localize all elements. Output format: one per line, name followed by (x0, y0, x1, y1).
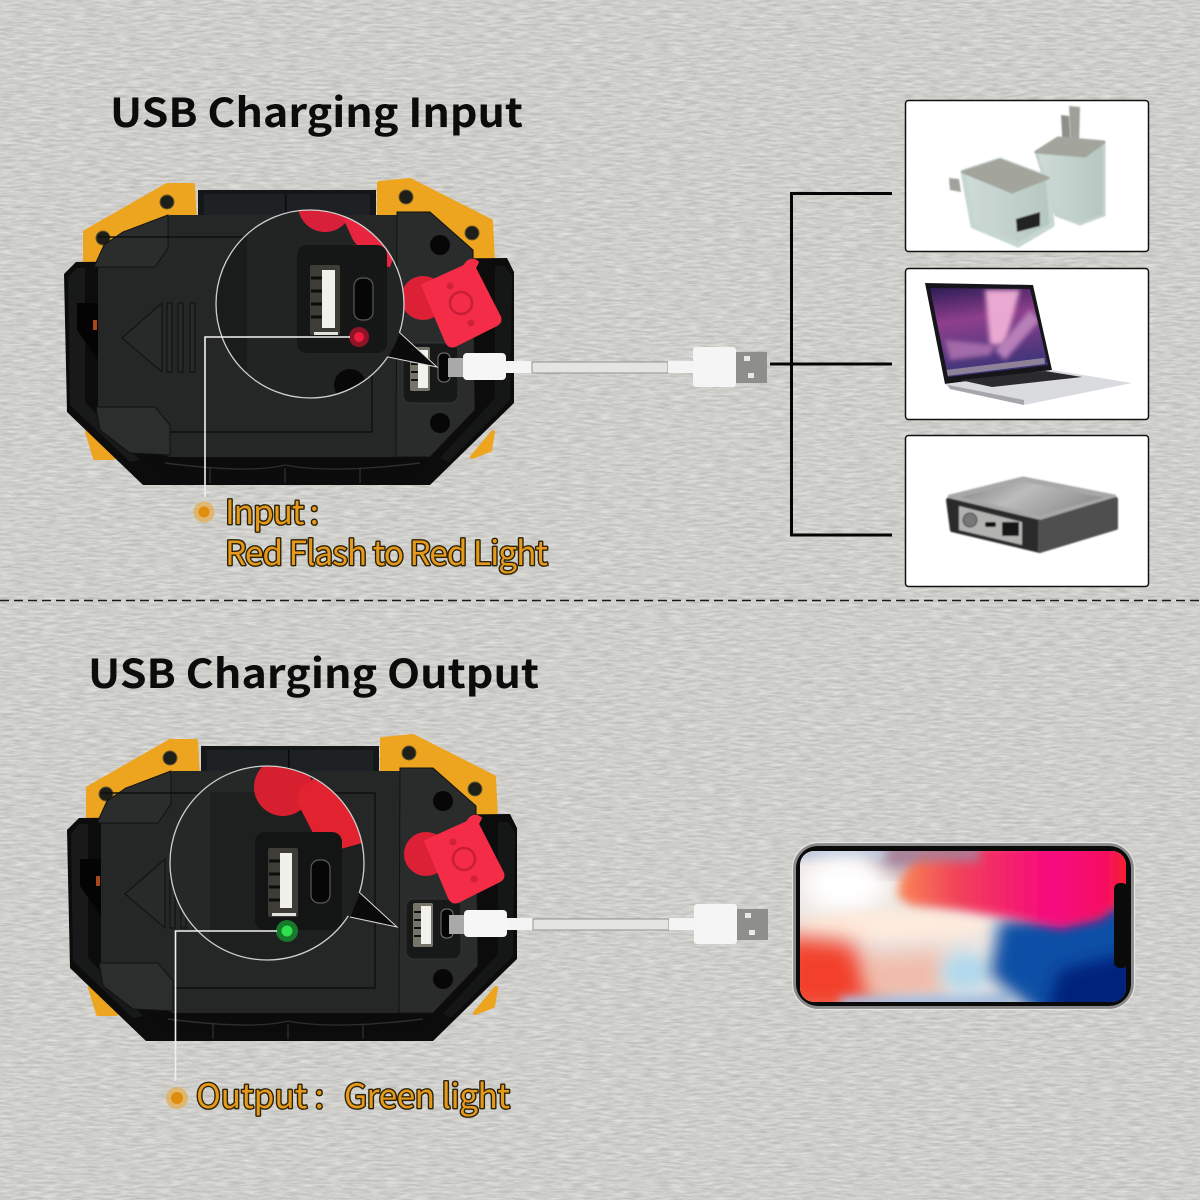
section divider (0, 600, 1200, 602)
card: wall adapters (906, 100, 1148, 252)
leader line: input LED (205, 337, 350, 497)
cable: output (449, 904, 768, 944)
magnifier callout: input ports (215, 209, 439, 399)
connector lines (770, 194, 892, 535)
label: output status (196, 1069, 510, 1118)
magnifier callout: output ports (165, 758, 397, 967)
cable: input (448, 347, 767, 387)
marker dot: input (194, 502, 214, 522)
device: flashlight, output (67, 736, 517, 1041)
card: power bank (906, 436, 1148, 586)
device: flashlight, input (64, 180, 514, 485)
label: output status: Green light (344, 1069, 510, 1118)
label: input status: Red Flash to Red Light (225, 526, 548, 575)
phone (780, 840, 1140, 1015)
title: USB Charging Input: USB Charging Input (110, 81, 523, 139)
label: input status: Input : (225, 485, 319, 534)
title: USB Charging Output: USB Charging Output (88, 642, 539, 700)
label: output status: Output : (196, 1069, 324, 1118)
card: laptop (906, 268, 1148, 420)
label: input status (225, 485, 548, 575)
leader line: output LED (176, 931, 277, 1081)
marker dot: output (166, 1087, 188, 1109)
